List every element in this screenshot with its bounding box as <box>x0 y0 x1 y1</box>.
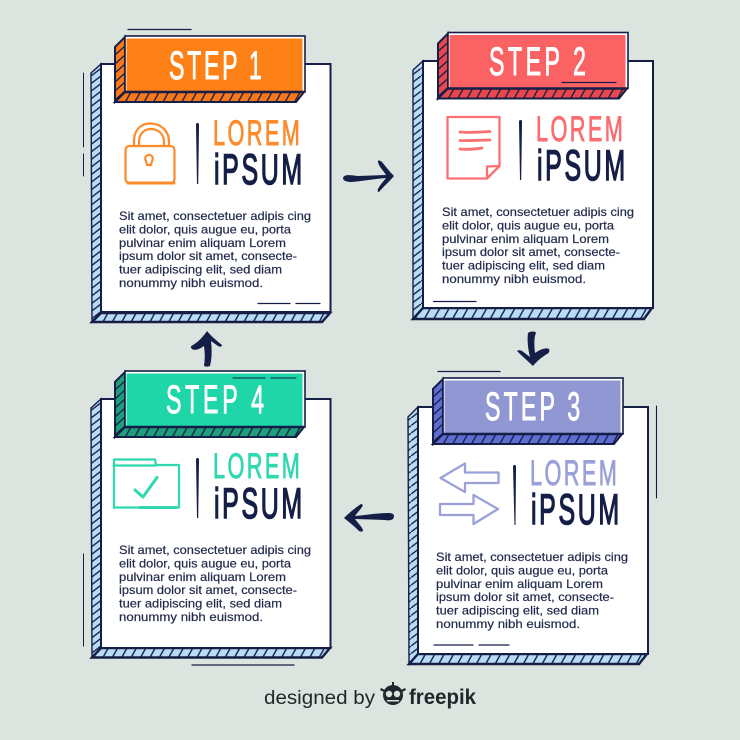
step 1 banner <box>115 36 305 102</box>
arrow: step 3 to step 4 <box>344 504 394 532</box>
body text: nonummy nibh euismod. <box>436 617 580 631</box>
panel body <box>413 61 653 319</box>
body text: tuer adipiscing elit, sed diam <box>442 259 605 273</box>
body text: pulvinar enim aliquam Lorem <box>442 232 609 246</box>
body text <box>119 209 311 290</box>
title: lorem: LOREM <box>213 115 300 153</box>
panel body <box>91 64 330 322</box>
panel: step 1 <box>91 36 330 322</box>
body text: nonummy nibh euismod. <box>119 276 263 290</box>
body text: nonummy nibh euismod. <box>119 610 263 624</box>
divider <box>513 465 516 525</box>
body text: Sit amet, consectetuer adipis cing <box>119 543 311 557</box>
sketch strokes: step 4 <box>84 378 296 665</box>
sketch strokes: step 2 <box>434 82 616 302</box>
body text: Sit amet, consectetuer adipis cing <box>436 550 628 564</box>
step 1 label: STEP 1 <box>169 42 262 88</box>
divider <box>196 123 199 184</box>
body text: tuer adipiscing elit, sed diam <box>119 263 282 277</box>
title: ipsum: iPSUM <box>531 486 619 534</box>
title: lorem: LOREM <box>530 455 617 493</box>
title: ipsum: iPSUM <box>214 480 302 528</box>
sketch strokes: step 3 <box>434 372 656 645</box>
footer credit <box>264 682 476 709</box>
panel: step 3 <box>408 378 648 664</box>
panel body <box>408 407 648 664</box>
step 3 banner <box>433 378 623 444</box>
arrow: step 1 to step 2 <box>343 160 394 192</box>
body text: ipsum dolor sit amet, consecte- <box>442 245 620 259</box>
body text: nonummy nibh euismod. <box>442 272 586 286</box>
body text: elit dolor, quis augue eu, porta <box>119 222 291 236</box>
designed by: designed by <box>264 687 375 709</box>
body text: tuer adipiscing elit, sed diam <box>119 597 282 611</box>
sketch strokes: step 1 <box>84 30 320 304</box>
step 3 label: STEP 3 <box>485 383 580 429</box>
title: ipsum: iPSUM <box>214 146 302 194</box>
body text: Sit amet, consectetuer adipis cing <box>119 209 311 223</box>
title: lorem: LOREM <box>213 448 300 486</box>
panel: step 4 <box>91 371 330 658</box>
panel: step 2 <box>413 32 653 319</box>
body text: ipsum dolor sit amet, consecte- <box>119 249 297 263</box>
icon: padlock <box>126 124 174 183</box>
divider <box>519 120 522 180</box>
freepik: freepik <box>409 686 476 709</box>
arrow: step 4 to step 1 <box>191 331 222 367</box>
divider <box>196 458 199 518</box>
title: ipsum: iPSUM <box>537 142 625 190</box>
body text: ipsum dolor sit amet, consecte- <box>436 590 614 604</box>
body text: pulvinar enim aliquam Lorem <box>119 570 286 584</box>
body text <box>436 550 628 631</box>
icon: folder with check <box>114 460 179 508</box>
panel body <box>91 399 330 658</box>
icon: freepik logo <box>380 682 406 705</box>
body text: tuer adipiscing elit, sed diam <box>436 604 599 618</box>
body text: pulvinar enim aliquam Lorem <box>119 236 286 250</box>
body text: elit dolor, quis augue eu, porta <box>442 218 614 232</box>
step 4 label: STEP 4 <box>166 376 264 422</box>
body text: ipsum dolor sit amet, consecte- <box>119 583 297 597</box>
body text <box>442 205 634 286</box>
body text: pulvinar enim aliquam Lorem <box>436 577 603 591</box>
icon: document <box>448 117 500 178</box>
body text <box>119 543 311 624</box>
body text: elit dolor, quis augue eu, porta <box>119 556 291 570</box>
step 2 label: STEP 2 <box>489 38 586 84</box>
icon: swap arrows <box>440 464 498 524</box>
step 2 banner <box>438 32 628 98</box>
body text: Sit amet, consectetuer adipis cing <box>442 205 634 219</box>
arrow: step 2 to step 3 <box>517 332 549 366</box>
title: lorem: LOREM <box>536 111 623 149</box>
step 4 banner <box>115 371 305 437</box>
body text: elit dolor, quis augue eu, porta <box>436 563 608 577</box>
